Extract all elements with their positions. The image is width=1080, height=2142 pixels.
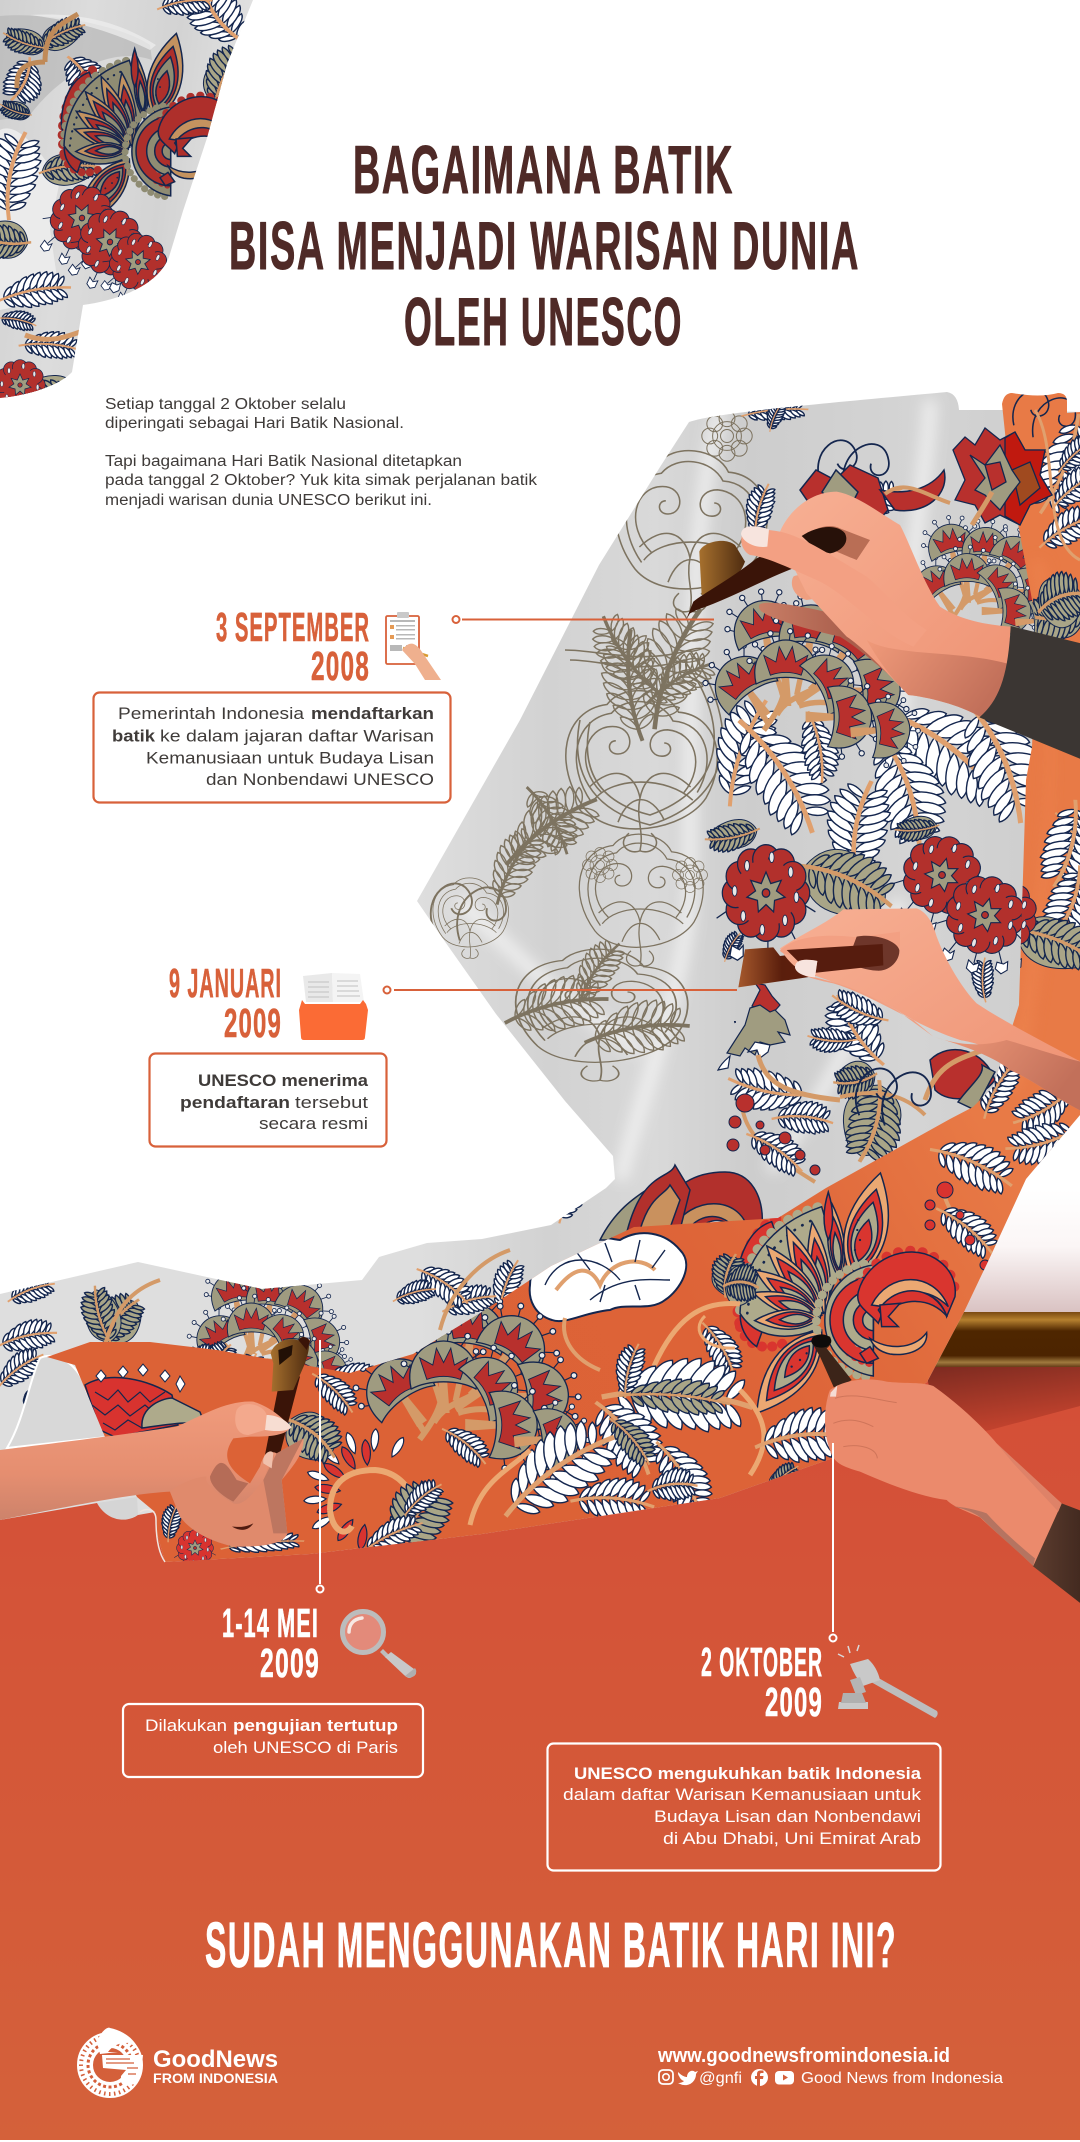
red sprig lower [727, 1094, 820, 1183]
canting handle [686, 527, 846, 620]
olive and white sprig [594, 1344, 752, 1479]
intro text [105, 396, 537, 509]
logo mark [81, 2028, 143, 2094]
logo: GoodNews from Indonesia: FROM INDONESIA [153, 2070, 278, 2086]
box: 9 Januari text: UNESCO menerima [198, 1071, 369, 1090]
red cluster on left orange [85, 1364, 205, 1437]
top-left batik cloth [0, 0, 253, 398]
date: 3 September 2008 [216, 604, 370, 689]
box: 9 Januari text: secara resmi [259, 1114, 368, 1133]
semi flower at fold [600, 1165, 762, 1240]
box: 1-14 Mei text: Dilakukan [145, 1716, 227, 1735]
box: 2 Oktober text: di Abu Dhabi, Uni Emirat Arab [663, 1829, 921, 1848]
intro text: Tapi bagaimana Hari Batik Nasional ditetapkan [105, 453, 462, 470]
title: OLEH UNESCO [404, 284, 683, 360]
main batik cloth: grey section [0, 392, 1080, 1562]
hand 4 with canting [811, 1334, 1080, 1603]
red flower upper grey [800, 465, 995, 1110]
icon: clipboard with hand [386, 612, 441, 680]
date: 9 Januari 2009 [169, 960, 282, 1046]
thumbnail [265, 1415, 292, 1431]
icon: youtube [775, 2071, 794, 2084]
title [229, 132, 860, 360]
big flower [737, 1168, 955, 1425]
text: 2 OKTOBER [701, 1639, 823, 1685]
red white sprig [925, 1182, 1008, 1270]
date: 1-14 Mei 2009 [222, 1600, 320, 1686]
channel name: Good News from Indonesia [801, 2070, 1003, 2087]
intro text: diperingati sebagai Hari Batik Nasional. [105, 415, 404, 432]
intro text: Setiap tanggal 2 Oktober selalu [105, 396, 346, 413]
text: 3 SEPTEMBER [216, 604, 370, 650]
table shadow [925, 1367, 1080, 1440]
date: 2 Oktober 2009: 2009 [765, 1679, 823, 1725]
connector 1 [452, 616, 714, 623]
logo: GoodNews from Indonesia: GoodNews [153, 2046, 278, 2073]
box: 9 Januari text [150, 1054, 386, 1146]
rosette over grey and orange, upper right [953, 428, 1052, 525]
date: 2 Oktober 2009 [701, 1639, 823, 1725]
icon: instagram [659, 2070, 673, 2084]
main batik cloth: orange section [47, 387, 1080, 1576]
hand 1 with canting [686, 492, 1080, 759]
title: BAGAIMANA BATIK [353, 132, 734, 208]
box: 3 September text: Kemanusiaan untuk Budaya Lisan [146, 748, 434, 768]
hand 3 with canting [0, 1337, 310, 1547]
box: 2 Oktober text: dalam daftar Warisan Kemanusiaan untuk [563, 1785, 922, 1804]
white paisley scrolled leaf [530, 1233, 686, 1370]
box: 3 September text [94, 692, 450, 802]
text: 9 JANUARI [169, 960, 282, 1006]
icon: facebook [751, 2069, 768, 2086]
intro text: pada tanggal 2 Oktober? Yuk kita simak perjalanan batik [105, 472, 537, 489]
box: 1-14 Mei text: oleh UNESCO di Paris [213, 1738, 398, 1757]
box: 2 Oktober text [548, 1744, 940, 1870]
box: 3 September text: Pemerintah Indonesia [118, 704, 305, 723]
box: 9 Januari text: tersebut [295, 1093, 368, 1112]
icon: magnifying glass [342, 1612, 416, 1678]
icon: twitter [678, 2071, 698, 2085]
social media row [659, 2069, 1003, 2087]
box: 3 September text: batik [112, 726, 156, 746]
box: 3 September text: dan Nonbendawi UNESCO [206, 770, 434, 789]
thumbnail [795, 960, 817, 977]
box: 9 Januari text: pendaftaran [180, 1093, 290, 1112]
date: 1-14 Mei 2009: 1-14 MEI [222, 1600, 319, 1646]
red and white feather ring [304, 1429, 418, 1550]
box: 1-14 Mei text: pengujian tertutup [233, 1716, 398, 1735]
carnation flower [718, 983, 790, 1070]
logo: GoodNews from Indonesia [81, 2028, 278, 2094]
sleeve [979, 626, 1080, 759]
hand 2 with canting [738, 908, 1080, 1111]
sleeve [1033, 1503, 1080, 1603]
thumbnail [741, 526, 769, 547]
box: 2 Oktober text: Budaya Lisan dan Nonbendawi [654, 1807, 921, 1826]
connector 2 [384, 986, 737, 994]
coloured motifs on grey [817, 439, 890, 476]
date: 3 September 2008: 2008 [311, 643, 370, 689]
date: 9 Januari 2009: 2009 [224, 1000, 282, 1046]
website url: www.goodnewsfromindonesia.id [657, 2045, 950, 2067]
canting pot [699, 541, 745, 595]
wooden frame band [925, 1312, 1080, 1368]
box: 3 September text: ke dalam jajaran daftar Warisan [160, 726, 434, 746]
box: 1-14 Mei text [123, 1704, 423, 1777]
icon: gavel [838, 1645, 938, 1718]
connector 4 [830, 1443, 836, 1642]
handle: @gnfi [699, 2070, 742, 2087]
box: 2 Oktober text: UNESCO mengukuhkan batik Indonesia [574, 1764, 922, 1783]
icon: documents in tray [299, 973, 368, 1040]
outlined wax motifs [431, 411, 767, 1081]
connector 3 [316, 1340, 324, 1592]
box: 3 September text: mendaftarkan [311, 704, 434, 723]
date: 1-14 Mei 2009: 2009 [260, 1640, 320, 1686]
intro text: menjadi warisan dunia UNESCO berikut ini. [105, 492, 432, 509]
